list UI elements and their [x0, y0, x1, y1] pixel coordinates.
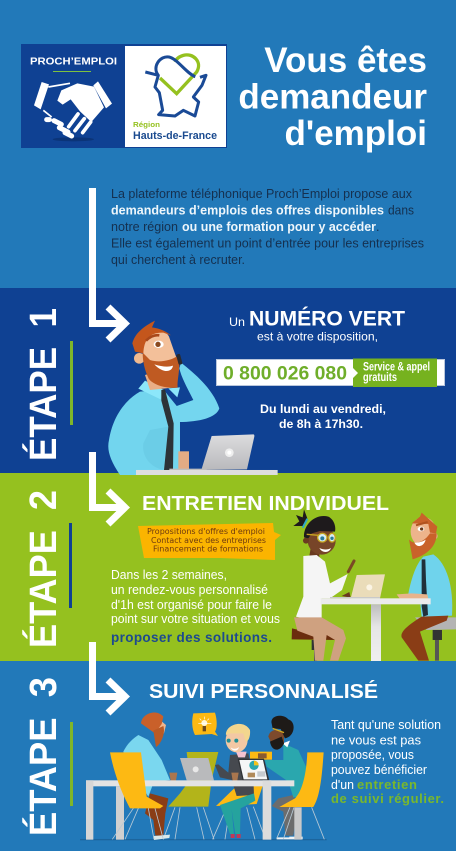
arrow: step 2 to step 3	[92, 642, 125, 713]
text block: intro: Elle est également un point d’entrée pour les entreprises	[111, 236, 424, 250]
heading: étape 1: ÉTAPE 1	[21, 308, 65, 461]
man	[397, 513, 456, 661]
title	[238, 41, 427, 153]
text block: step 3 description: pouvez bénéficier	[331, 763, 427, 777]
cup	[178, 451, 189, 470]
text block: step 3 description: proposée, vous	[331, 748, 414, 762]
text block: intro: dans	[388, 204, 414, 218]
text block: step 2 description: d'1h est organisé pour faire le	[111, 598, 272, 612]
tie	[161, 389, 174, 470]
text block: step 2 description	[111, 568, 280, 645]
panel: step 3 background	[0, 661, 456, 851]
illustration: team meeting	[80, 712, 327, 840]
text block: intro	[111, 187, 424, 267]
callout: orange note: Propositions d'offres d'emploi	[147, 527, 265, 536]
text block: step 2 description: point sur votre situation et vous	[111, 612, 280, 626]
coffee cups	[169, 773, 239, 781]
laptop	[351, 574, 385, 598]
text: un numéro vert	[229, 308, 405, 344]
illustration: man on the phone	[108, 321, 278, 475]
panel: step 2 background	[0, 473, 456, 661]
arrow: intro to step 1	[92, 188, 125, 340]
free call tag: gratuits	[363, 372, 397, 384]
tablet	[238, 759, 269, 780]
chair back left	[168, 752, 218, 807]
callout: orange note	[138, 523, 281, 560]
stool	[312, 640, 318, 650]
free call tag	[353, 358, 437, 387]
logo text: Proch'Emploi: PROCH’EMPLOI	[30, 56, 117, 68]
woman	[215, 724, 255, 838]
table	[371, 604, 381, 661]
phone number box	[216, 358, 444, 387]
text block: step 3 description: de suivi régulier.	[331, 791, 444, 806]
title: demandeur	[238, 78, 427, 116]
text block: step 3 description	[331, 718, 444, 806]
arm	[175, 363, 219, 422]
text: opening hours	[260, 402, 386, 431]
panel: intro background	[0, 0, 456, 288]
text block: intro: La plateforme téléphonique Proch’Emploi propose aux	[111, 187, 413, 201]
accent bar: step 2	[69, 523, 72, 608]
text block: step 2 description: Dans les 2 semaines,	[111, 568, 227, 582]
callout: orange note: Financement de formations	[153, 544, 263, 554]
logo text: Hauts-de-France: Hauts-de-France	[133, 130, 217, 142]
text block: intro: .	[376, 220, 379, 234]
laptop	[180, 758, 214, 780]
title: d'emploi	[284, 114, 427, 153]
text block: step 3 description: ne vous est pas	[331, 734, 421, 748]
chair front right	[277, 752, 324, 839]
text block: intro: demandeurs d’emplois des offres disponibles	[111, 204, 384, 218]
heading: étape 3: ÉTAPE 3	[21, 677, 65, 836]
free call tag: Service & appel	[363, 362, 430, 374]
text block: step 2 description: proposer des solutions.	[111, 630, 272, 645]
heading: suivi personnalisé: SUIVI PERSONNALISÉ	[149, 680, 378, 703]
accent bar: step 1	[70, 341, 73, 425]
illustration: interview at table	[292, 509, 456, 661]
text block: step 2 description: un rendez-vous personnalisé	[111, 583, 268, 597]
heading: étape 2: ÉTAPE 2	[21, 490, 65, 648]
title: Vous êtes	[264, 41, 427, 80]
heading: entretien individuel: ENTRETIEN INDIVIDUEL	[142, 492, 389, 515]
text: un numéro vert: Un	[229, 315, 245, 329]
desk	[136, 470, 278, 475]
man left	[123, 712, 170, 840]
text block: step 3 description: entretien	[357, 777, 417, 792]
head	[145, 367, 175, 390]
text: un numéro vert: est à votre disposition,	[257, 330, 378, 344]
icon: handshake	[34, 81, 112, 141]
icon: idea bubble	[192, 713, 218, 736]
text: opening hours: de 8h à 17h30.	[279, 417, 363, 431]
chair back right	[250, 752, 272, 760]
arrow: step 1 to step 2	[92, 452, 125, 524]
text block: step 3 description: Tant qu'une solution	[331, 718, 441, 732]
text: opening hours: Du lundi au vendredi,	[260, 402, 386, 416]
panel: step 1 background	[0, 288, 456, 473]
logo: Proch'Emploi and Hauts-de-France	[21, 44, 227, 148]
text block: intro: notre région	[111, 220, 178, 234]
chair front left	[110, 752, 163, 839]
man right	[258, 716, 306, 839]
text block: intro: qui cherchent à recruter.	[111, 253, 245, 267]
phone	[176, 354, 183, 365]
laptop	[201, 434, 254, 470]
accent bar: step 3	[70, 722, 73, 806]
body	[108, 389, 180, 475]
callout: orange note: Contact avec des entreprises	[151, 536, 266, 545]
woman	[293, 509, 354, 661]
phone number: 0 800 026 080	[223, 364, 347, 384]
logo text: Région: Région	[133, 120, 160, 129]
text: un numéro vert: NUMÉRO VERT	[249, 308, 405, 330]
table	[86, 780, 302, 840]
logo: France heart map	[145, 55, 206, 116]
text block: step 3 description: d'un	[331, 778, 354, 792]
text block: intro: ou une formation pour y accéder	[182, 220, 376, 234]
